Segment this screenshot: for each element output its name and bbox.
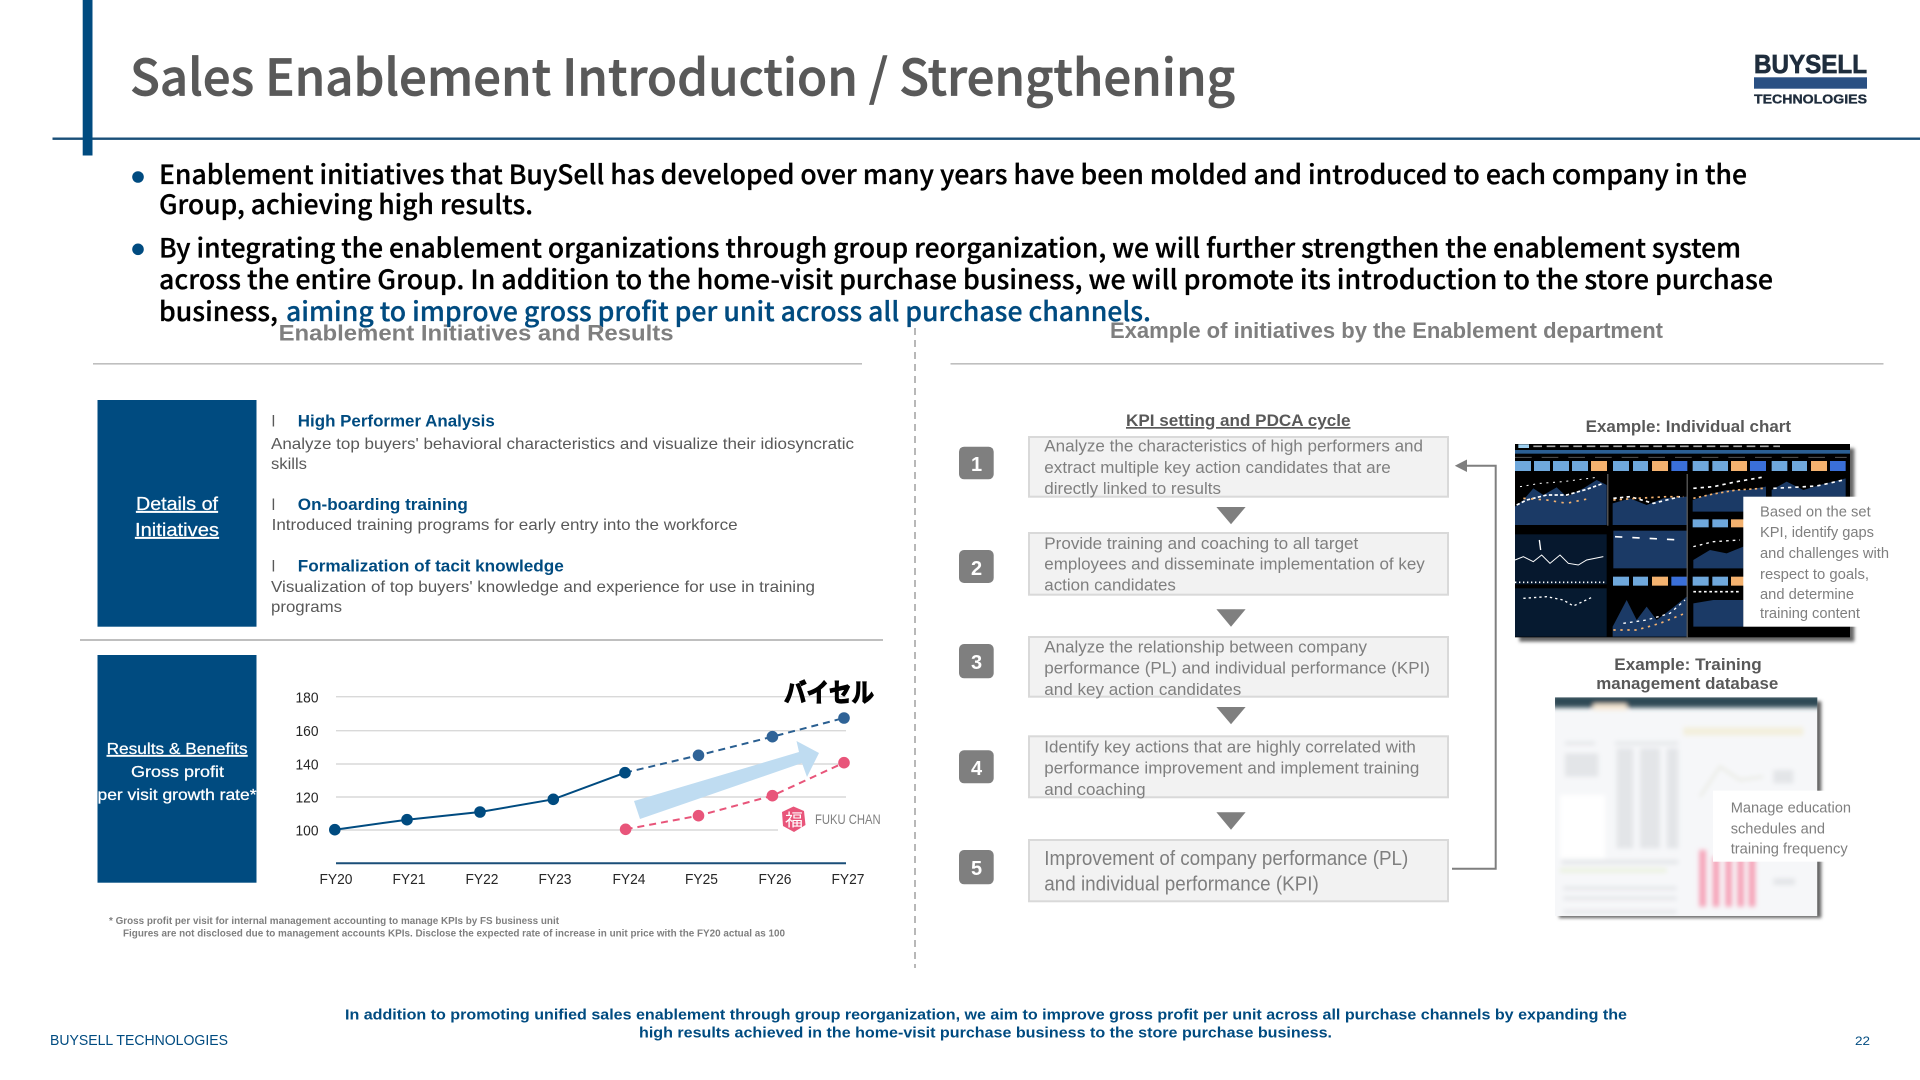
x axis labels: FY23 bbox=[538, 872, 572, 888]
step 3: 3 bbox=[971, 652, 982, 674]
initiative: on-boarding training: On-boarding training bbox=[298, 496, 468, 514]
conclusion statement bbox=[345, 1006, 1627, 1041]
arrow: upward growth trend bbox=[634, 741, 819, 819]
callout: individual chart note: and challenges with bbox=[1760, 545, 1889, 562]
step 4: Identify key actions that are highly correlated with bbox=[1044, 738, 1416, 757]
step 5: Improvement of company performance (PL) bbox=[1044, 848, 1408, 870]
step 4: performance improvement and implement training bbox=[1044, 758, 1419, 777]
step 3: Analyze the relationship between company bbox=[1044, 638, 1367, 657]
step 2: Provide training and coaching to all target bbox=[1044, 534, 1359, 553]
example heading: training management database: Example: Training bbox=[1614, 656, 1762, 674]
footnote: * Gross profit per visit for internal management accounting to manage KPIs by FS business unit bbox=[109, 916, 560, 927]
x axis labels: FY24 bbox=[612, 872, 646, 888]
x axis labels: FY25 bbox=[685, 872, 718, 888]
y axis labels: 160 bbox=[296, 724, 318, 740]
footer: company name: BUYSELL TECHNOLOGIES bbox=[50, 1032, 228, 1049]
initiative: high performer analysis bbox=[271, 413, 854, 473]
arrow: step 1 to 2 bbox=[1216, 507, 1246, 524]
bullet 2: aiming to improve gross profit per unit across all purchase channels. bbox=[286, 290, 1151, 329]
step 2: 2 bbox=[971, 558, 982, 580]
step 5 bbox=[959, 840, 1448, 901]
step 4 bbox=[959, 736, 1448, 799]
callout: individual chart note: and determine bbox=[1760, 586, 1854, 603]
y axis labels: 140 bbox=[296, 758, 318, 774]
footer: page number: 22 bbox=[1855, 1034, 1870, 1048]
series: BuySell actual and forecast bbox=[329, 712, 850, 836]
step 5: and individual performance (KPI) bbox=[1044, 874, 1319, 896]
callout: individual chart note bbox=[1743, 497, 1890, 627]
logo: BuySell Technologies bbox=[1754, 49, 1867, 106]
bullet 1 bbox=[132, 153, 1747, 222]
logo: BuySell Technologies: TECHNOLOGIES bbox=[1754, 91, 1867, 106]
initiative: on-boarding training bbox=[272, 496, 738, 534]
x axis labels: FY26 bbox=[758, 872, 792, 888]
step 4: 4 bbox=[971, 758, 983, 780]
callout: training database note: schedules and bbox=[1731, 820, 1825, 837]
bullet 1: Enablement initiatives that BuySell has developed over many years have been molded and introduced to each company in the bbox=[159, 153, 1747, 192]
example heading: individual chart: Example: Individual chart bbox=[1586, 418, 1792, 436]
y axis labels bbox=[296, 690, 318, 840]
label box: details of initiatives bbox=[98, 400, 256, 627]
panel: details of initiatives bbox=[98, 400, 854, 627]
header rule and accent bar bbox=[52, 0, 1920, 156]
x axis labels: FY22 bbox=[466, 872, 498, 888]
panel: results and benefits bbox=[98, 655, 881, 888]
logo: Fuku Chan: FUKU CHAN bbox=[815, 811, 881, 827]
step 1: directly linked to results bbox=[1044, 479, 1221, 498]
bullet 2 bbox=[132, 226, 1773, 329]
initiative: high performer analysis: High Performer Analysis bbox=[298, 413, 495, 431]
arrow: feedback loop from step 5 to step 1 bbox=[1452, 460, 1496, 869]
label box: results and benefits: Gross profit bbox=[131, 764, 225, 781]
footnote: Figures are not disclosed due to management accounts KPIs. Disclose the expected rate of increase in unit price with the FY20 actual as 100 bbox=[123, 929, 785, 940]
callout: individual chart note: training content bbox=[1760, 605, 1861, 622]
step 2 bbox=[959, 533, 1448, 595]
initiative: on-boarding training: Introduced training programs for early entry into the workforce bbox=[272, 517, 738, 534]
initiative: high performer analysis: skills bbox=[271, 456, 307, 473]
label box: results and benefits bbox=[98, 655, 256, 883]
step 1: Analyze the characteristics of high performers and bbox=[1044, 437, 1423, 456]
bullet 2: across the entire Group. In addition to the home-visit purchase business, we will promote its introduction to the store purchase bbox=[159, 258, 1773, 297]
example heading: training management database: management database bbox=[1596, 675, 1778, 693]
bullet 2: By integrating the enablement organizations through group reorganization, we will further strengthen the enablement system bbox=[159, 226, 1741, 266]
callout: individual chart note: respect to goals, bbox=[1760, 566, 1869, 583]
footnote bbox=[109, 916, 785, 940]
step 2: action candidates bbox=[1044, 576, 1176, 595]
initiative: high performer analysis: l bbox=[272, 414, 275, 431]
initiative: formalization of tacit knowledge: Visualization of top buyers' knowledge and experience for use in training bbox=[271, 579, 815, 596]
step 3 bbox=[959, 637, 1448, 699]
callout: training database note bbox=[1713, 791, 1858, 862]
step 3: and key action candidates bbox=[1044, 680, 1241, 699]
x axis labels: FY20 bbox=[320, 872, 352, 888]
label box: results and benefits: per visit growth rate* bbox=[98, 787, 256, 804]
section heading: Example of initiatives: Example of initiatives by the Enablement department bbox=[1110, 318, 1664, 343]
initiative: formalization of tacit knowledge: programs bbox=[271, 599, 342, 616]
y axis labels: 100 bbox=[296, 824, 318, 840]
logo: Fuku Chan bbox=[782, 806, 881, 832]
callout: individual chart note: KPI, identify gaps bbox=[1760, 524, 1874, 541]
logo: Fuku Chan: 福 bbox=[785, 811, 803, 830]
initiative: formalization of tacit knowledge bbox=[271, 558, 815, 616]
logo: BuySell Technologies: BUYSELL bbox=[1754, 49, 1867, 79]
conclusion statement: In addition to promoting unified sales enablement through group reorganization, we aim to improve gross profit per unit across all purchase channels by expanding the bbox=[345, 1006, 1627, 1023]
bullet text block bbox=[132, 153, 1773, 329]
initiative: high performer analysis: Analyze top buyers' behavioral characteristics and visualize their idiosyncratic bbox=[271, 436, 854, 453]
flow: KPI and PDCA steps bbox=[959, 437, 1448, 901]
image: training management database (blurred) bbox=[1552, 695, 1822, 918]
callout: training database note: training frequency bbox=[1731, 840, 1848, 857]
step 1 bbox=[959, 437, 1448, 498]
example heading: training management database bbox=[1596, 656, 1778, 693]
heading: KPI setting and PDCA cycle: KPI setting and PDCA cycle bbox=[1126, 411, 1350, 430]
line chart: gross profit per visit growth rate bbox=[296, 678, 881, 888]
label box: details of initiatives: Initiatives bbox=[135, 520, 219, 540]
title: Sales Enablement Introduction / Strengthening bbox=[130, 38, 1235, 110]
bullet 2: business, bbox=[159, 290, 278, 329]
step 4: and coaching bbox=[1044, 780, 1146, 799]
step 1: extract multiple key action candidates that are bbox=[1044, 458, 1391, 477]
logo: バイセル: バイセル bbox=[784, 678, 874, 708]
step 5: 5 bbox=[971, 858, 982, 880]
x axis labels: FY27 bbox=[832, 872, 864, 888]
arrow: step 3 to 4 bbox=[1216, 707, 1246, 724]
y axis labels: 120 bbox=[296, 790, 318, 806]
image: individual chart dashboard bbox=[1515, 444, 1854, 642]
initiative: on-boarding training: l bbox=[272, 497, 275, 514]
series: Fuku Chan forecast bbox=[620, 757, 850, 835]
label box: details of initiatives: Details of bbox=[136, 494, 219, 514]
callout: individual chart note: Based on the set bbox=[1760, 504, 1872, 521]
step 2: employees and disseminate implementation of key bbox=[1044, 554, 1425, 573]
callout: training database note: Manage education bbox=[1731, 799, 1851, 816]
label box: results and benefits: Results & Benefits bbox=[107, 741, 248, 758]
step 1: 1 bbox=[971, 454, 982, 476]
x axis labels: FY21 bbox=[392, 872, 426, 888]
arrow: step 2 to 3 bbox=[1216, 609, 1246, 627]
section heading: Enablement Initiatives and Results: Enablement Initiatives and Results bbox=[279, 320, 674, 346]
arrow: step 4 to 5 bbox=[1216, 812, 1246, 830]
x axis labels bbox=[320, 872, 864, 888]
bullet 1: Group, achieving high results. bbox=[159, 183, 533, 222]
y axis labels: 180 bbox=[296, 690, 318, 706]
step 3: performance (PL) and individual performance (KPI) bbox=[1044, 658, 1430, 677]
initiative: formalization of tacit knowledge: Formalization of tacit knowledge bbox=[298, 558, 564, 576]
initiative: formalization of tacit knowledge: l bbox=[272, 559, 275, 576]
conclusion statement: high results achieved in the home-visit purchase business to the store purchase business. bbox=[639, 1024, 1332, 1041]
